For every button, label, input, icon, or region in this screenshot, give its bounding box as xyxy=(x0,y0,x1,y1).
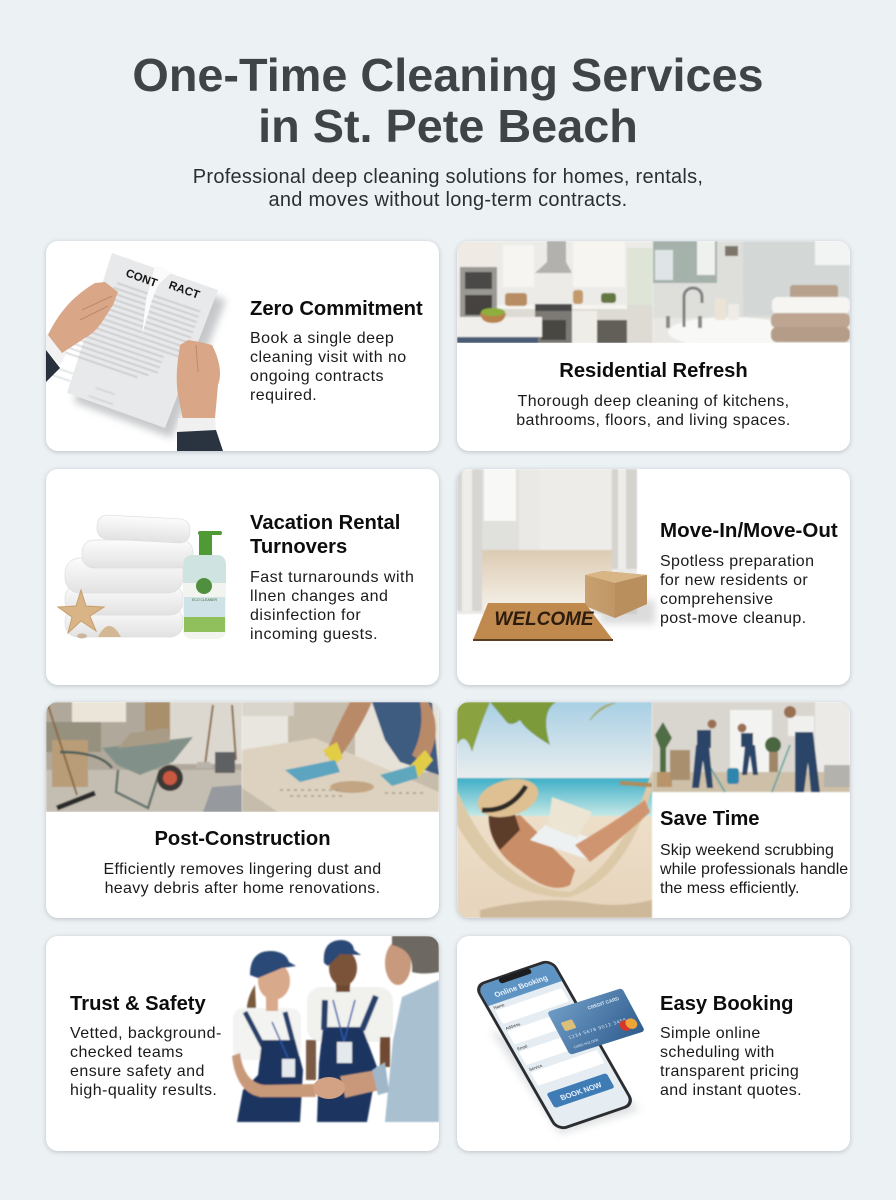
description: Efficiently removes lingering dust and xyxy=(103,861,382,878)
smartphone: Online Booking xyxy=(492,973,550,999)
cleaning crew room xyxy=(652,702,850,792)
description: Simple online xyxy=(660,1025,761,1042)
left hand xyxy=(46,282,118,382)
description: checked teams xyxy=(70,1044,183,1061)
description: transparent pricing xyxy=(660,1063,799,1080)
description: heavy debris after home renovations. xyxy=(105,880,380,897)
description xyxy=(660,1025,802,1099)
description: the mess efficiently. xyxy=(660,880,799,897)
description: ensure safety and xyxy=(70,1063,205,1080)
bathroom xyxy=(653,241,850,347)
towels xyxy=(771,285,850,342)
credit card xyxy=(547,988,645,1055)
title: One-Time Cleaning Services xyxy=(132,49,764,101)
heading: Vacation Rental xyxy=(250,512,400,534)
description: required. xyxy=(250,387,317,404)
smartphone: Email xyxy=(516,1044,528,1051)
description xyxy=(660,553,814,627)
description: for new residents or xyxy=(660,572,808,589)
room xyxy=(457,469,637,614)
description xyxy=(250,569,414,643)
starfish xyxy=(58,590,104,633)
description: Vetted, background- xyxy=(70,1025,222,1042)
middle cleaner xyxy=(306,940,393,1122)
soap bottle xyxy=(183,531,226,639)
description: scheduling with xyxy=(660,1044,775,1061)
right hand xyxy=(177,340,223,451)
image: torn contract held by two hands xyxy=(46,253,228,451)
image: towels, bottle and shells xyxy=(56,514,226,639)
description xyxy=(70,1025,222,1099)
client xyxy=(340,936,439,1122)
subtitle xyxy=(193,166,703,211)
description: comprehensive xyxy=(660,591,773,608)
panel: save time xyxy=(457,702,850,918)
contract wording xyxy=(124,268,201,302)
description xyxy=(660,842,848,897)
subtitle: Professional deep cleaning solutions for homes, rentals, xyxy=(193,166,703,188)
image: uniformed cleaners shaking hands with client xyxy=(231,936,439,1124)
image: empty room with welcome mat and box xyxy=(457,469,658,641)
title xyxy=(132,49,764,152)
image: construction debris and wiping dust xyxy=(46,702,439,812)
heading: Save Time xyxy=(660,808,760,830)
smartphone: Address xyxy=(504,1021,521,1031)
description: ongoing contracts xyxy=(250,368,384,385)
seashell xyxy=(77,626,121,638)
description: high-quality results. xyxy=(70,1082,217,1099)
image: smartphone booking form and credit card xyxy=(477,960,644,1135)
panel: vacation rental turnovers xyxy=(46,469,439,685)
heading: Trust & Safety xyxy=(70,993,206,1015)
panel: trust and safety xyxy=(46,936,439,1151)
description: Spotless preparation xyxy=(660,553,814,570)
heading: Move-In/Move-Out xyxy=(660,519,838,542)
description: bathrooms, floors, and living spaces. xyxy=(516,412,791,429)
heading: Zero Commitment xyxy=(250,298,423,320)
credit card: CARD HOLDER xyxy=(573,1038,600,1049)
credit card: CREDIT CARD xyxy=(587,996,621,1011)
heading: Turnovers xyxy=(250,536,347,558)
description: incoming guests. xyxy=(250,626,378,643)
towel stack xyxy=(65,515,193,637)
image: woman in hammock and cleaning crew xyxy=(457,702,850,918)
heading: Post-Construction xyxy=(154,828,331,850)
contract wording: RACT xyxy=(167,280,201,302)
panel: move-in/move-out xyxy=(457,469,850,685)
handshake xyxy=(313,1077,345,1099)
smartphone: Service xyxy=(528,1063,544,1072)
left cleaner xyxy=(232,951,316,1122)
description xyxy=(103,861,382,897)
description: llnen changes and xyxy=(250,588,388,605)
beach scene xyxy=(457,702,652,918)
description: Thorough deep cleaning of kitchens, xyxy=(518,393,789,410)
description: Book a single deep xyxy=(250,330,394,347)
description: while professionals handle xyxy=(660,861,848,878)
subtitle: and moves without long-term contracts. xyxy=(269,189,627,211)
heading: Residential Refresh xyxy=(559,360,748,382)
gloved hands wiping dusty table xyxy=(242,702,439,812)
contract wording: CONT xyxy=(124,268,159,290)
description xyxy=(250,330,407,404)
heading xyxy=(250,512,400,558)
reclining woman xyxy=(473,773,650,888)
title: in St. Pete Beach xyxy=(258,100,638,152)
soap bottle: ECO CLEANER xyxy=(192,598,218,602)
description: Fast turnarounds with xyxy=(250,569,414,586)
description: disinfection for xyxy=(250,607,361,624)
wheelbarrow scene xyxy=(46,702,242,812)
description: and instant quotes. xyxy=(660,1082,802,1099)
heading: Easy Booking xyxy=(660,993,794,1015)
panel: post-construction xyxy=(46,702,439,918)
welcome mat xyxy=(473,603,613,641)
smartphone: BOOK NOW xyxy=(558,1080,604,1102)
welcome mat: WELCOME xyxy=(494,609,595,630)
description: Skip weekend scrubbing xyxy=(660,842,834,859)
description: post-move cleanup. xyxy=(660,610,806,627)
credit card: 1234 5678 9012 3456 xyxy=(568,1017,628,1041)
image: kitchen and bathroom xyxy=(457,241,850,343)
description xyxy=(516,393,791,429)
smartphone: Name xyxy=(492,1002,506,1010)
smartphone xyxy=(473,958,636,1132)
kitchen xyxy=(457,241,653,343)
cardboard box xyxy=(585,571,655,624)
panel: easy booking xyxy=(457,936,850,1151)
panel: residential refresh xyxy=(457,241,850,451)
description: cleaning visit with no xyxy=(250,349,407,366)
panel: zero commitment xyxy=(46,241,439,451)
hammock xyxy=(457,770,652,897)
